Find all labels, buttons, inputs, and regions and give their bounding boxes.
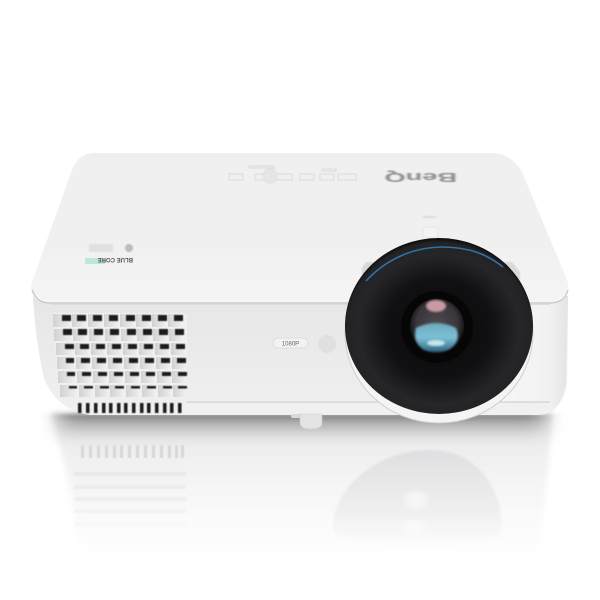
- blue ring: [366, 247, 503, 281]
- floor reflection: [52, 412, 552, 560]
- logo: BLUE CORE: BLUE CORE: [98, 256, 133, 262]
- adjustable foot: [291, 414, 322, 429]
- lens assembly: [345, 238, 533, 423]
- logo: BLUE CORE: [85, 256, 133, 264]
- top lid: [31, 153, 568, 303]
- lower lip: [75, 402, 552, 415]
- focus lever: [423, 216, 438, 238]
- bright spot: [427, 340, 445, 346]
- glass: [410, 299, 464, 353]
- black barrel: [345, 238, 533, 414]
- pink reflection: [426, 300, 446, 312]
- shadow under projector: [60, 414, 544, 448]
- lens recess: [362, 262, 520, 292]
- right end face: [500, 296, 568, 415]
- top sticker icons: [89, 244, 133, 252]
- glass surround: [401, 291, 473, 363]
- blue reflection: [415, 323, 458, 352]
- logo: BenQ: BenQ: [384, 170, 457, 184]
- reflected lens: [333, 450, 502, 545]
- control panel: [229, 166, 356, 183]
- white ring: [345, 243, 533, 423]
- 1080P badge: 1080P: [282, 342, 299, 348]
- vent grille: [53, 313, 187, 397]
- lower vent slots: [78, 403, 182, 413]
- projector body: [31, 153, 568, 415]
- reflected vent grid: [74, 472, 186, 526]
- front face: [33, 296, 568, 415]
- sensor dot: [318, 335, 336, 353]
- lid edge: [32, 290, 568, 303]
- reflected vent slots: [81, 445, 184, 458]
- 1080P badge: [273, 338, 308, 348]
